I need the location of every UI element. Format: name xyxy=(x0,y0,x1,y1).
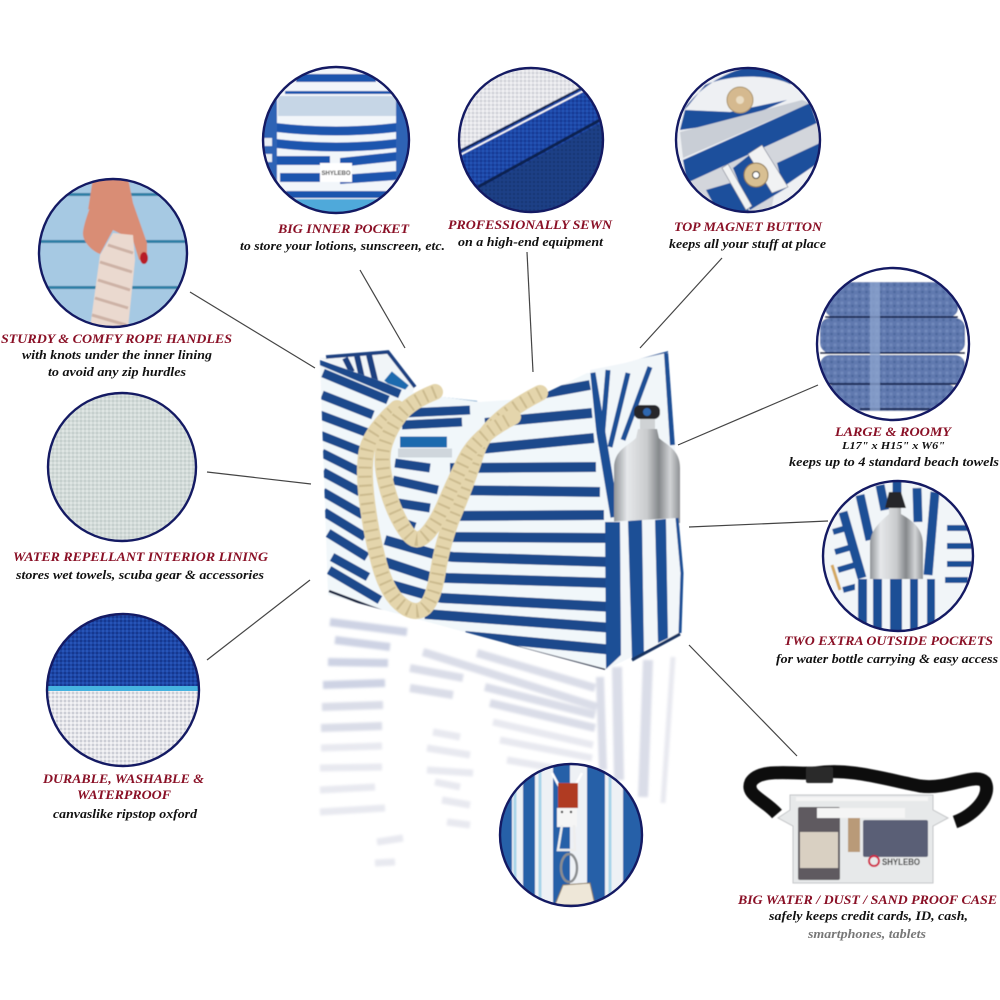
buckle xyxy=(806,767,833,783)
chain ring xyxy=(561,854,577,882)
circle: ripstop fabric xyxy=(45,612,201,767)
reflection of the bag xyxy=(320,622,673,863)
pointer lines xyxy=(190,252,828,756)
brand label xyxy=(320,163,352,182)
caption: professionally sewn xyxy=(448,217,613,249)
circle: outside pockets xyxy=(822,478,975,634)
hanging loops xyxy=(552,773,582,786)
leather tab xyxy=(558,783,578,808)
caption: outside pockets xyxy=(776,633,998,666)
bottle xyxy=(870,508,923,579)
clear case xyxy=(778,795,948,883)
water bottle xyxy=(614,405,680,523)
rope xyxy=(90,233,135,328)
caption: proof case: smartphones, tablets xyxy=(807,927,926,941)
circle: inner pocket: SHYLEBO xyxy=(321,171,351,177)
bottom charm xyxy=(555,883,595,905)
caption: outside pockets: TWO EXTRA OUTSIDE POCKETS xyxy=(784,633,993,648)
bag interior xyxy=(319,352,537,403)
caption: big inner pocket: BIG INNER POCKET xyxy=(277,221,410,236)
caption: big inner pocket xyxy=(240,221,445,253)
outside pocket xyxy=(605,518,682,670)
caption: top magnet button xyxy=(669,219,827,251)
caption: durable: WATERPROOF xyxy=(77,787,171,802)
caption: rope handles xyxy=(1,331,232,379)
caption: professionally sewn: PROFESSIONALLY SEWN xyxy=(448,217,613,232)
caption: rope handles: with knots under the inner lining xyxy=(22,348,212,362)
pocket xyxy=(854,578,859,590)
logo xyxy=(869,856,879,866)
caption: proof case: BIG WATER / DUST / SAND PROOF CASE xyxy=(737,892,997,907)
circle: rope handle xyxy=(38,178,188,328)
waterproof pouch xyxy=(750,767,987,883)
snap tab xyxy=(732,155,787,210)
caption: outside pockets: for water bottle carrying & easy access xyxy=(776,652,998,666)
rope handles xyxy=(365,392,540,611)
circle: stitching xyxy=(458,66,604,214)
caption: large and roomy xyxy=(789,424,999,469)
caption: proof case xyxy=(737,892,997,941)
metal plate xyxy=(556,807,571,828)
bag side panel xyxy=(590,350,680,532)
top snap xyxy=(727,87,753,113)
circle: towels xyxy=(815,266,971,422)
caption: big inner pocket: to store your lotions, sunscreen, etc. xyxy=(240,239,445,253)
caption: rope handles: to avoid any zip hurdles xyxy=(48,365,186,379)
caption: large and roomy: LARGE & ROOMY xyxy=(834,424,952,439)
waist strap xyxy=(750,772,987,822)
circle: inner pocket xyxy=(260,65,415,217)
caption: large and roomy: L17" x H15" x W6" xyxy=(841,441,945,452)
caption: top magnet button: TOP MAGNET BUTTON xyxy=(674,219,823,234)
lower snap xyxy=(744,163,768,187)
brand text: SHYLEBO xyxy=(882,857,920,867)
caption: rope handles: STURDY & COMFY ROPE HANDLES xyxy=(1,331,232,346)
hand xyxy=(83,178,147,260)
caption: proof case: safely keeps credit cards, ID, cash, xyxy=(768,909,968,923)
caption: professionally sewn: on a high-end equipment xyxy=(458,235,604,249)
caption: interior lining: WATER REPELLANT INTERIOR LINING xyxy=(13,549,269,564)
bag front panel xyxy=(319,360,607,671)
caption: interior lining: stores wet towels, scuba gear & accessories xyxy=(15,568,264,582)
caption: durable: canvaslike ripstop oxford xyxy=(53,807,198,821)
caption: durable xyxy=(42,771,204,821)
caption: top magnet button: keeps all your stuff at place xyxy=(669,237,827,251)
caption: large and roomy: keeps up to 4 standard beach towels xyxy=(789,455,999,469)
tote bag xyxy=(310,340,690,680)
caption: durable: DURABLE, WASHABLE & xyxy=(42,771,204,786)
circle: strap and key clip xyxy=(498,762,644,908)
circle: magnet button xyxy=(674,66,824,216)
caption: interior lining xyxy=(13,549,269,582)
circle: interior lining xyxy=(46,391,198,543)
